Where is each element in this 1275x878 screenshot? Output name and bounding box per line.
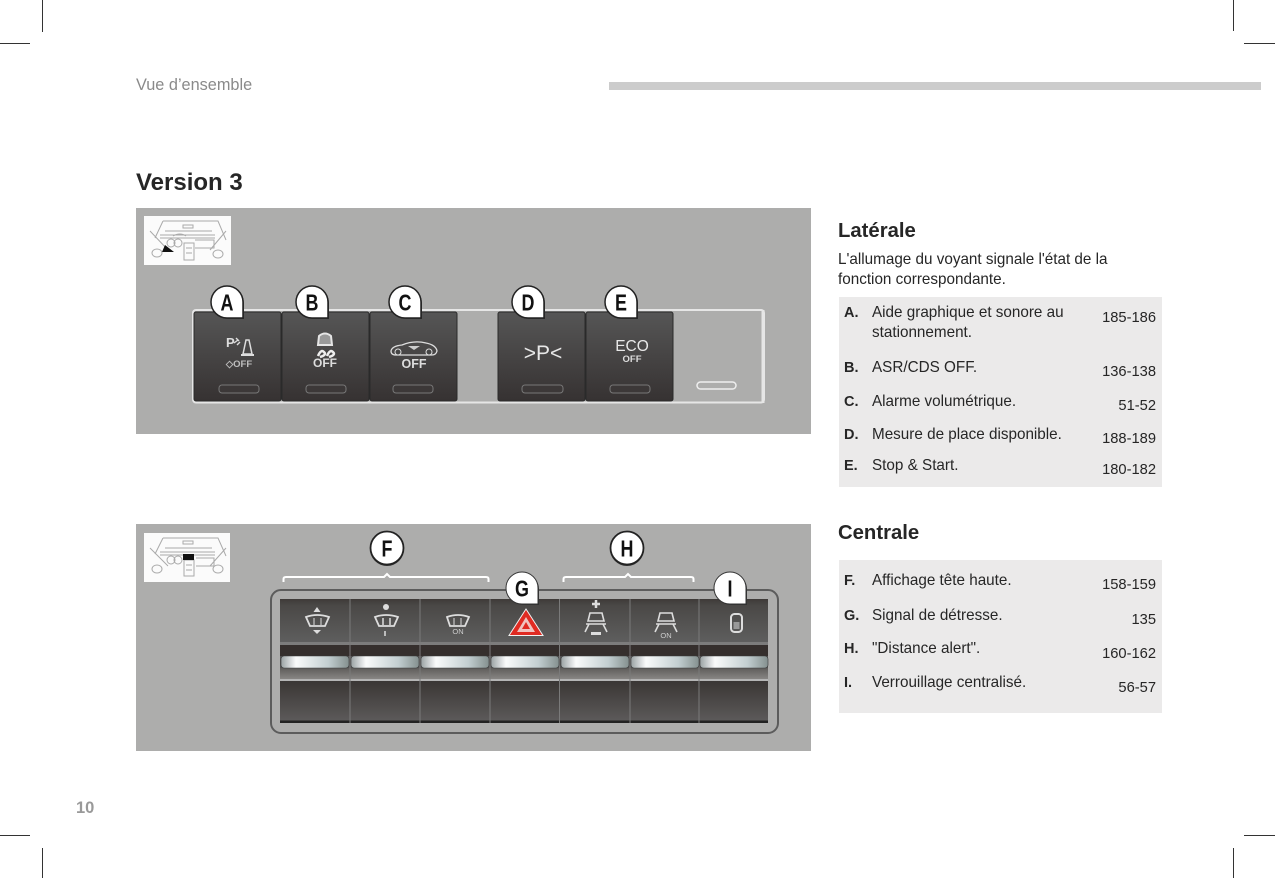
table: lateral functions: 136-138 — [1102, 364, 1156, 380]
table: central functions: Affichage tête haute. — [872, 572, 1012, 589]
icon: wiper brightness — [375, 604, 398, 636]
button A: ◇OFF — [225, 359, 252, 370]
table: lateral functions: A. — [844, 305, 858, 321]
callout C — [389, 286, 422, 319]
bracket H — [564, 574, 694, 582]
table: lateral functions: E. — [844, 458, 858, 474]
callout I — [714, 572, 747, 605]
icon: central lock — [731, 614, 742, 632]
callout C: C — [399, 290, 412, 316]
callout F: F — [382, 536, 392, 562]
switch strip — [280, 599, 768, 723]
title: Version 3 — [136, 169, 243, 196]
table: lateral functions: Aide graphique et sonore au — [872, 304, 1064, 321]
icon: wiper on — [447, 615, 469, 636]
icon: wiper on: ON — [452, 627, 464, 636]
button A: P — [226, 335, 235, 350]
callout H: H — [621, 536, 633, 562]
icon: distance on — [655, 613, 677, 640]
icon: cabin locator side — [144, 216, 231, 265]
button A — [194, 312, 281, 401]
button C — [370, 312, 457, 401]
switch outline — [193, 310, 764, 403]
table: lateral functions: B. — [844, 360, 858, 376]
table: central functions: G. — [844, 608, 859, 624]
table: lateral functions: Mesure de place disponible. — [872, 426, 1062, 443]
callout E — [605, 286, 638, 319]
callout F — [370, 532, 404, 566]
intro text — [838, 251, 1108, 288]
page number: 10 — [76, 799, 94, 817]
table: lateral functions: ASR/CDS OFF. — [872, 359, 977, 376]
table: central functions: 158-159 — [1102, 577, 1156, 593]
table: lateral functions: Stop & Start. — [872, 457, 958, 474]
panel: central switches — [136, 524, 811, 751]
table: central functions: I. — [844, 675, 852, 691]
table: central functions: Verrouillage centralisé. — [872, 674, 1026, 691]
callout B — [296, 286, 329, 319]
intro text: L'allumage du voyant signale l'état de la — [838, 251, 1108, 268]
table: central functions: F. — [844, 573, 855, 589]
button D: >P< — [524, 342, 562, 365]
button E: ECO — [615, 338, 649, 355]
chrome bars — [281, 656, 768, 668]
table: central functions: 135 — [1131, 612, 1156, 628]
console frame — [271, 590, 778, 733]
section label: Vue d’ensemble — [136, 76, 252, 94]
table: lateral functions: stationnement. — [872, 324, 972, 341]
table: lateral functions: 51-52 — [1118, 398, 1156, 414]
header bar — [609, 82, 1261, 90]
table: lateral functions: 180-182 — [1102, 462, 1156, 478]
table: lateral functions: Alarme volumétrique. — [872, 393, 1016, 410]
callout I: I — [728, 576, 732, 602]
callout D — [512, 286, 545, 319]
table: central functions — [839, 560, 1162, 713]
callout A: A — [221, 290, 234, 316]
table: lateral functions — [839, 297, 1162, 487]
callout G — [506, 572, 539, 605]
table: lateral functions: D. — [844, 427, 858, 443]
icon: distance on: ON — [660, 631, 672, 640]
bracket F — [284, 574, 488, 582]
table: lateral functions: C. — [844, 394, 858, 410]
icon: hazard triangle — [509, 609, 543, 636]
button B — [282, 312, 369, 401]
table: lateral functions: 185-186 — [1102, 310, 1156, 326]
heading: Latérale: Latérale — [838, 220, 916, 242]
button D — [498, 312, 585, 401]
icon: wiper height — [306, 607, 329, 634]
table: central functions: Signal de détresse. — [872, 607, 1003, 624]
callout G: G — [515, 576, 529, 602]
callout H — [610, 532, 644, 566]
table: central functions: H. — [844, 641, 858, 657]
callout A — [211, 286, 244, 319]
button E — [586, 312, 673, 401]
table: central functions: 56-57 — [1118, 680, 1156, 696]
button E: OFF — [622, 354, 642, 365]
table: central functions: "Distance alert". — [872, 640, 980, 657]
intro text: fonction correspondante. — [838, 271, 1006, 288]
button C: OFF — [402, 357, 427, 371]
callout D: D — [522, 290, 535, 316]
table: lateral functions: 188-189 — [1102, 431, 1156, 447]
panel: side switches — [136, 208, 811, 434]
icon: distance plus minus — [585, 600, 607, 635]
icon: cabin locator central — [144, 533, 230, 582]
callout E: E — [615, 290, 627, 316]
table: central functions: 160-162 — [1102, 646, 1156, 662]
heading: Centrale: Centrale — [838, 522, 919, 544]
button B: OFF — [313, 356, 337, 370]
callout B: B — [306, 290, 318, 316]
